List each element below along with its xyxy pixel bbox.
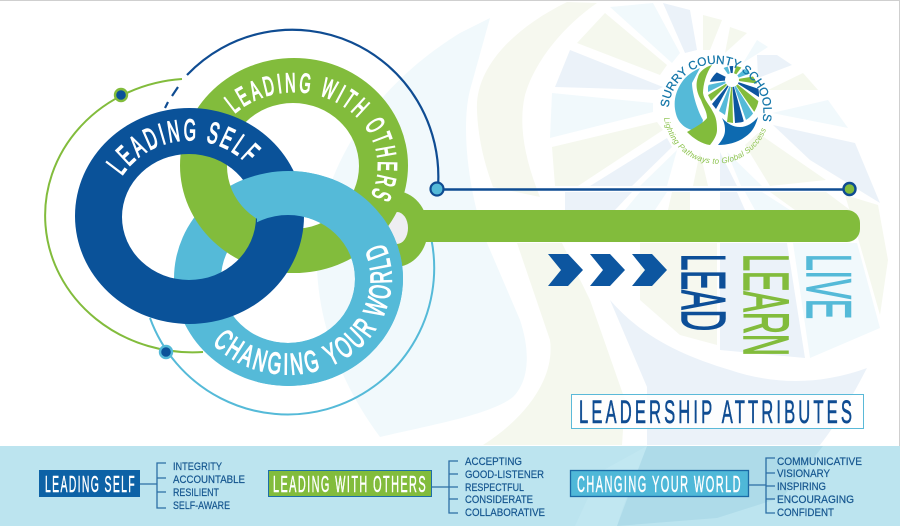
- attribute list: RESPECTFUL: [465, 482, 524, 494]
- label box: [39, 470, 140, 497]
- label box: [268, 470, 432, 497]
- background sunburst and swirl pattern: [317, 2, 888, 445]
- thin circle arc: light blue: [150, 240, 434, 414]
- label box: [570, 470, 748, 497]
- attribute group: leading self: [39, 461, 245, 512]
- node: green: [844, 183, 856, 195]
- ring: leading with others: [180, 58, 408, 273]
- attribute list: [173, 461, 245, 512]
- thin circle arc: navy: [165, 30, 438, 187]
- ring: leading self: [75, 108, 304, 324]
- attribute list: ACCOUNTABLE: [173, 474, 245, 486]
- ring: changing your world (under layer): [174, 171, 403, 386]
- attribute list: RESILIENT: [173, 487, 219, 499]
- attribute list: ENCOURAGING: [777, 494, 854, 506]
- attribute group: leading with others: [268, 456, 545, 519]
- logo: surry county schools: [660, 55, 772, 164]
- node: light blue: [430, 182, 444, 196]
- attribute list: COMMUNICATIVE: [777, 456, 862, 468]
- bracket: [140, 463, 166, 508]
- text: LIVE: [793, 254, 863, 319]
- ring label: leading with others: LEADING WITH OTHERS: [223, 72, 398, 202]
- attribute group: changing your world: [570, 456, 862, 519]
- thin circle arc: green: [45, 79, 203, 352]
- attribute list: COLLABORATIVE: [465, 507, 545, 519]
- logo name: SURRY COUNTY SCHOOLS: [660, 55, 772, 122]
- key bow joint behind rings: [362, 191, 428, 267]
- attribute list: CONFIDENT: [777, 507, 834, 519]
- attribute list: VISIONARY: [777, 468, 831, 480]
- bottom attributes strip background: [0, 446, 900, 526]
- attribute list: INTEGRITY: [173, 461, 223, 473]
- attribute group: leading with others: LEADING WITH OTHERS: [273, 471, 427, 497]
- logo tagline: Lighting Pathways to Global Success: [664, 118, 766, 164]
- bracket: [432, 461, 458, 513]
- ring overlap: light blue over navy and green: [230, 171, 403, 386]
- ring label: leading self: LEADING SELF: [105, 118, 262, 176]
- text: LEARN: [730, 254, 802, 356]
- text: LEAD: [668, 254, 737, 331]
- key handle bar: [395, 210, 860, 242]
- ring label: changing your world: CHANGING YOUR WORLD: [214, 245, 392, 376]
- connector line to green node: [437, 188, 849, 191]
- chevron arrows: [548, 254, 667, 286]
- logo disc: [674, 65, 759, 145]
- attribute list: INSPIRING: [777, 481, 826, 493]
- bracket: [748, 458, 775, 513]
- node: navy with green rim: [115, 89, 127, 101]
- attribute group: leading self: LEADING SELF: [45, 471, 136, 497]
- attribute list: CONSIDERATE: [465, 494, 533, 506]
- attribute list: GOOD-LISTENER: [465, 469, 544, 481]
- attribute list: [465, 456, 545, 519]
- attribute list: SELF-AWARE: [173, 500, 230, 512]
- node: navy with blue rim: [160, 346, 172, 358]
- attribute list: [777, 456, 862, 519]
- attribute list: ACCEPTING: [465, 456, 522, 468]
